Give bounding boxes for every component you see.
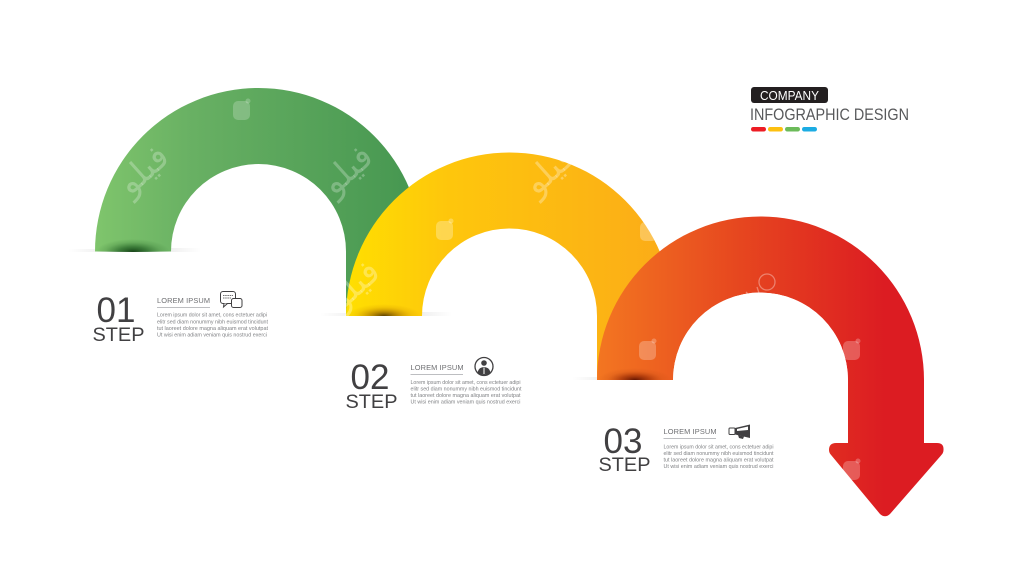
step 1 body text (157, 312, 269, 338)
watermark: yellow arch right logo (640, 220, 658, 241)
step 3 body text: Lorem ipsum dolor sit amet, cons ectetuer adipi (664, 444, 774, 450)
floor shadow: step 3 (572, 376, 703, 380)
step 2 number: 02 (351, 358, 389, 397)
watermark: yellow arch logo (436, 218, 454, 240)
watermark: red arch right logo (843, 338, 860, 360)
step 3 body text: tut laoreet dolore magna aliquam erat volutpat (664, 458, 774, 464)
step 3 label: STEP (598, 454, 650, 476)
step 2 body text (410, 380, 522, 406)
icon: person in circle (475, 358, 493, 376)
step 3 body text: Ut wisi enim adiam veniam quis nostrud exerci (664, 464, 774, 470)
step 1 body text: elitr sed diam nonummy nibh euismod tincidunt (157, 320, 269, 326)
step 3 body text: elitr sed diam nonummy nibh euismod tincidunt (664, 451, 774, 457)
watermark: yellow arch top: فيلو (514, 137, 583, 205)
icon: speech bubbles (220, 292, 242, 308)
step 1 body text: Ut wisi enim adiam veniam quis nostrud exerci (157, 332, 267, 338)
step 2 heading: LOREM IPSUM (410, 363, 464, 372)
step 2 label: STEP (346, 391, 398, 413)
watermark: red arch top (746, 274, 775, 298)
colour legend dashes (751, 127, 817, 132)
company badge: COMPANY (760, 89, 820, 103)
step 3 body text (664, 444, 774, 470)
watermark: green arch right: فيلو (312, 137, 381, 205)
infographic canvas (86, 87, 944, 516)
watermark: green arch logo (233, 98, 250, 120)
watermark: yellow arch left: فيلو (319, 252, 388, 320)
infographic design heading: INFOGRAPHIC DESIGN (750, 105, 909, 124)
step 1 body text: Lorem ipsum dolor sit amet, cons ectetuer adipi (157, 312, 267, 318)
watermark: arrow head logo (843, 458, 860, 480)
watermark: green arch left: فيلو (108, 137, 177, 205)
step 1 number: 01 (97, 291, 135, 330)
step 1 label: STEP (92, 324, 144, 346)
green arch: step 1 (95, 88, 422, 316)
title block (750, 87, 909, 132)
yellow arch: step 2 (346, 152, 673, 380)
step 3 heading: LOREM IPSUM (664, 427, 716, 436)
step 1 heading: LOREM IPSUM (157, 296, 210, 305)
step 2 body text: elitr sed diam nonummy nibh euismod tincidunt (410, 386, 522, 392)
step 1 text block (92, 291, 269, 346)
step 1 body text: tut laoreet dolore magna aliquam erat volutpat (157, 326, 269, 332)
icon: megaphone (729, 424, 750, 439)
step 2 body text: Ut wisi enim adiam veniam quis nostrud exerci (410, 400, 520, 406)
cover for the part of the watermark under the arch opening (673, 293, 848, 380)
step 3 number: 03 (604, 422, 642, 461)
red arrow arch: step 3 (597, 217, 944, 516)
watermark: red arch left logo (639, 338, 656, 360)
step 3 text block (598, 422, 774, 476)
step 2 body text: tut laoreet dolore magna aliquam erat volutpat (410, 393, 521, 399)
floor shadow: step 1 (68, 248, 201, 252)
step 2 body text: Lorem ipsum dolor sit amet, cons ectetuer adipi (410, 380, 520, 386)
floor shadow: step 2 (320, 312, 452, 316)
step 2 text block (346, 358, 522, 413)
